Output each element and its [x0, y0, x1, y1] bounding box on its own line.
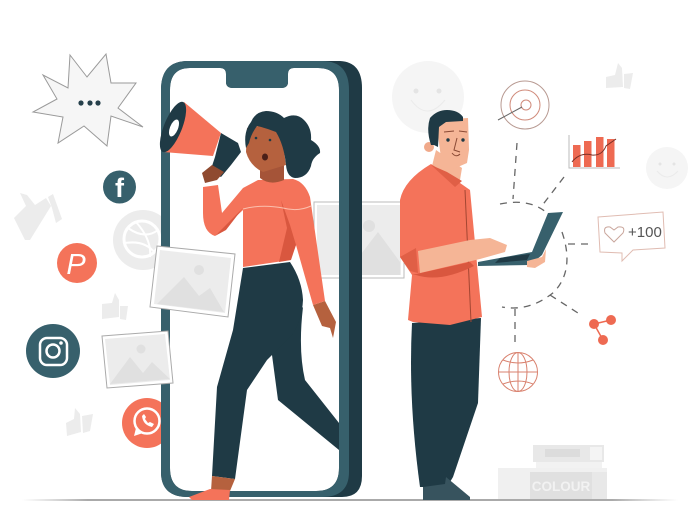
thumbs up top right [606, 63, 633, 89]
icon: pinterest [57, 243, 97, 283]
icon: instagram [26, 324, 80, 378]
hair [428, 110, 463, 147]
foot and shoe [211, 476, 235, 491]
hand right [313, 301, 336, 338]
icon: facebook: f [115, 173, 125, 203]
dashed connectors [500, 143, 592, 342]
icon: whatsapp [122, 398, 161, 448]
shoes [423, 477, 470, 500]
neck [432, 150, 462, 180]
likes callout: +100 [628, 224, 662, 241]
laptop [478, 212, 563, 266]
raised hand [202, 165, 224, 183]
icon: thumbs up [66, 408, 93, 436]
sweater [203, 179, 325, 305]
bar chart [569, 135, 620, 168]
forearm [418, 238, 507, 273]
back leg [270, 307, 339, 450]
stack of books: COLOUR [532, 479, 590, 494]
phone [161, 61, 362, 497]
icon: pinterest: P [66, 249, 86, 281]
shirt [400, 164, 482, 325]
left hand [527, 249, 546, 268]
mouth and eyes [262, 154, 268, 160]
front leg [212, 262, 303, 479]
likes callout [598, 212, 665, 261]
icon: target [498, 81, 549, 129]
trousers [411, 318, 481, 487]
stack of books [498, 445, 607, 499]
woman with megaphone [155, 99, 339, 500]
icon: small thumbs up [102, 293, 128, 320]
man with laptop [400, 110, 563, 500]
neck and head [260, 165, 284, 183]
icon: large thumbs up [14, 193, 62, 240]
image frame left upper [150, 246, 235, 317]
smiley large [392, 61, 464, 133]
hair [245, 111, 320, 178]
face [436, 118, 469, 170]
icon: share [589, 315, 616, 345]
icon: dribbble [113, 210, 161, 270]
speech burst with dots [33, 54, 143, 146]
megaphone [210, 133, 241, 177]
image frame left lower [102, 331, 173, 388]
icon: facebook [103, 170, 136, 204]
icon: globe [498, 352, 538, 392]
image frame behind phone [314, 202, 404, 278]
face details [446, 138, 465, 142]
smiley small [646, 147, 688, 189]
ground line [22, 499, 678, 501]
